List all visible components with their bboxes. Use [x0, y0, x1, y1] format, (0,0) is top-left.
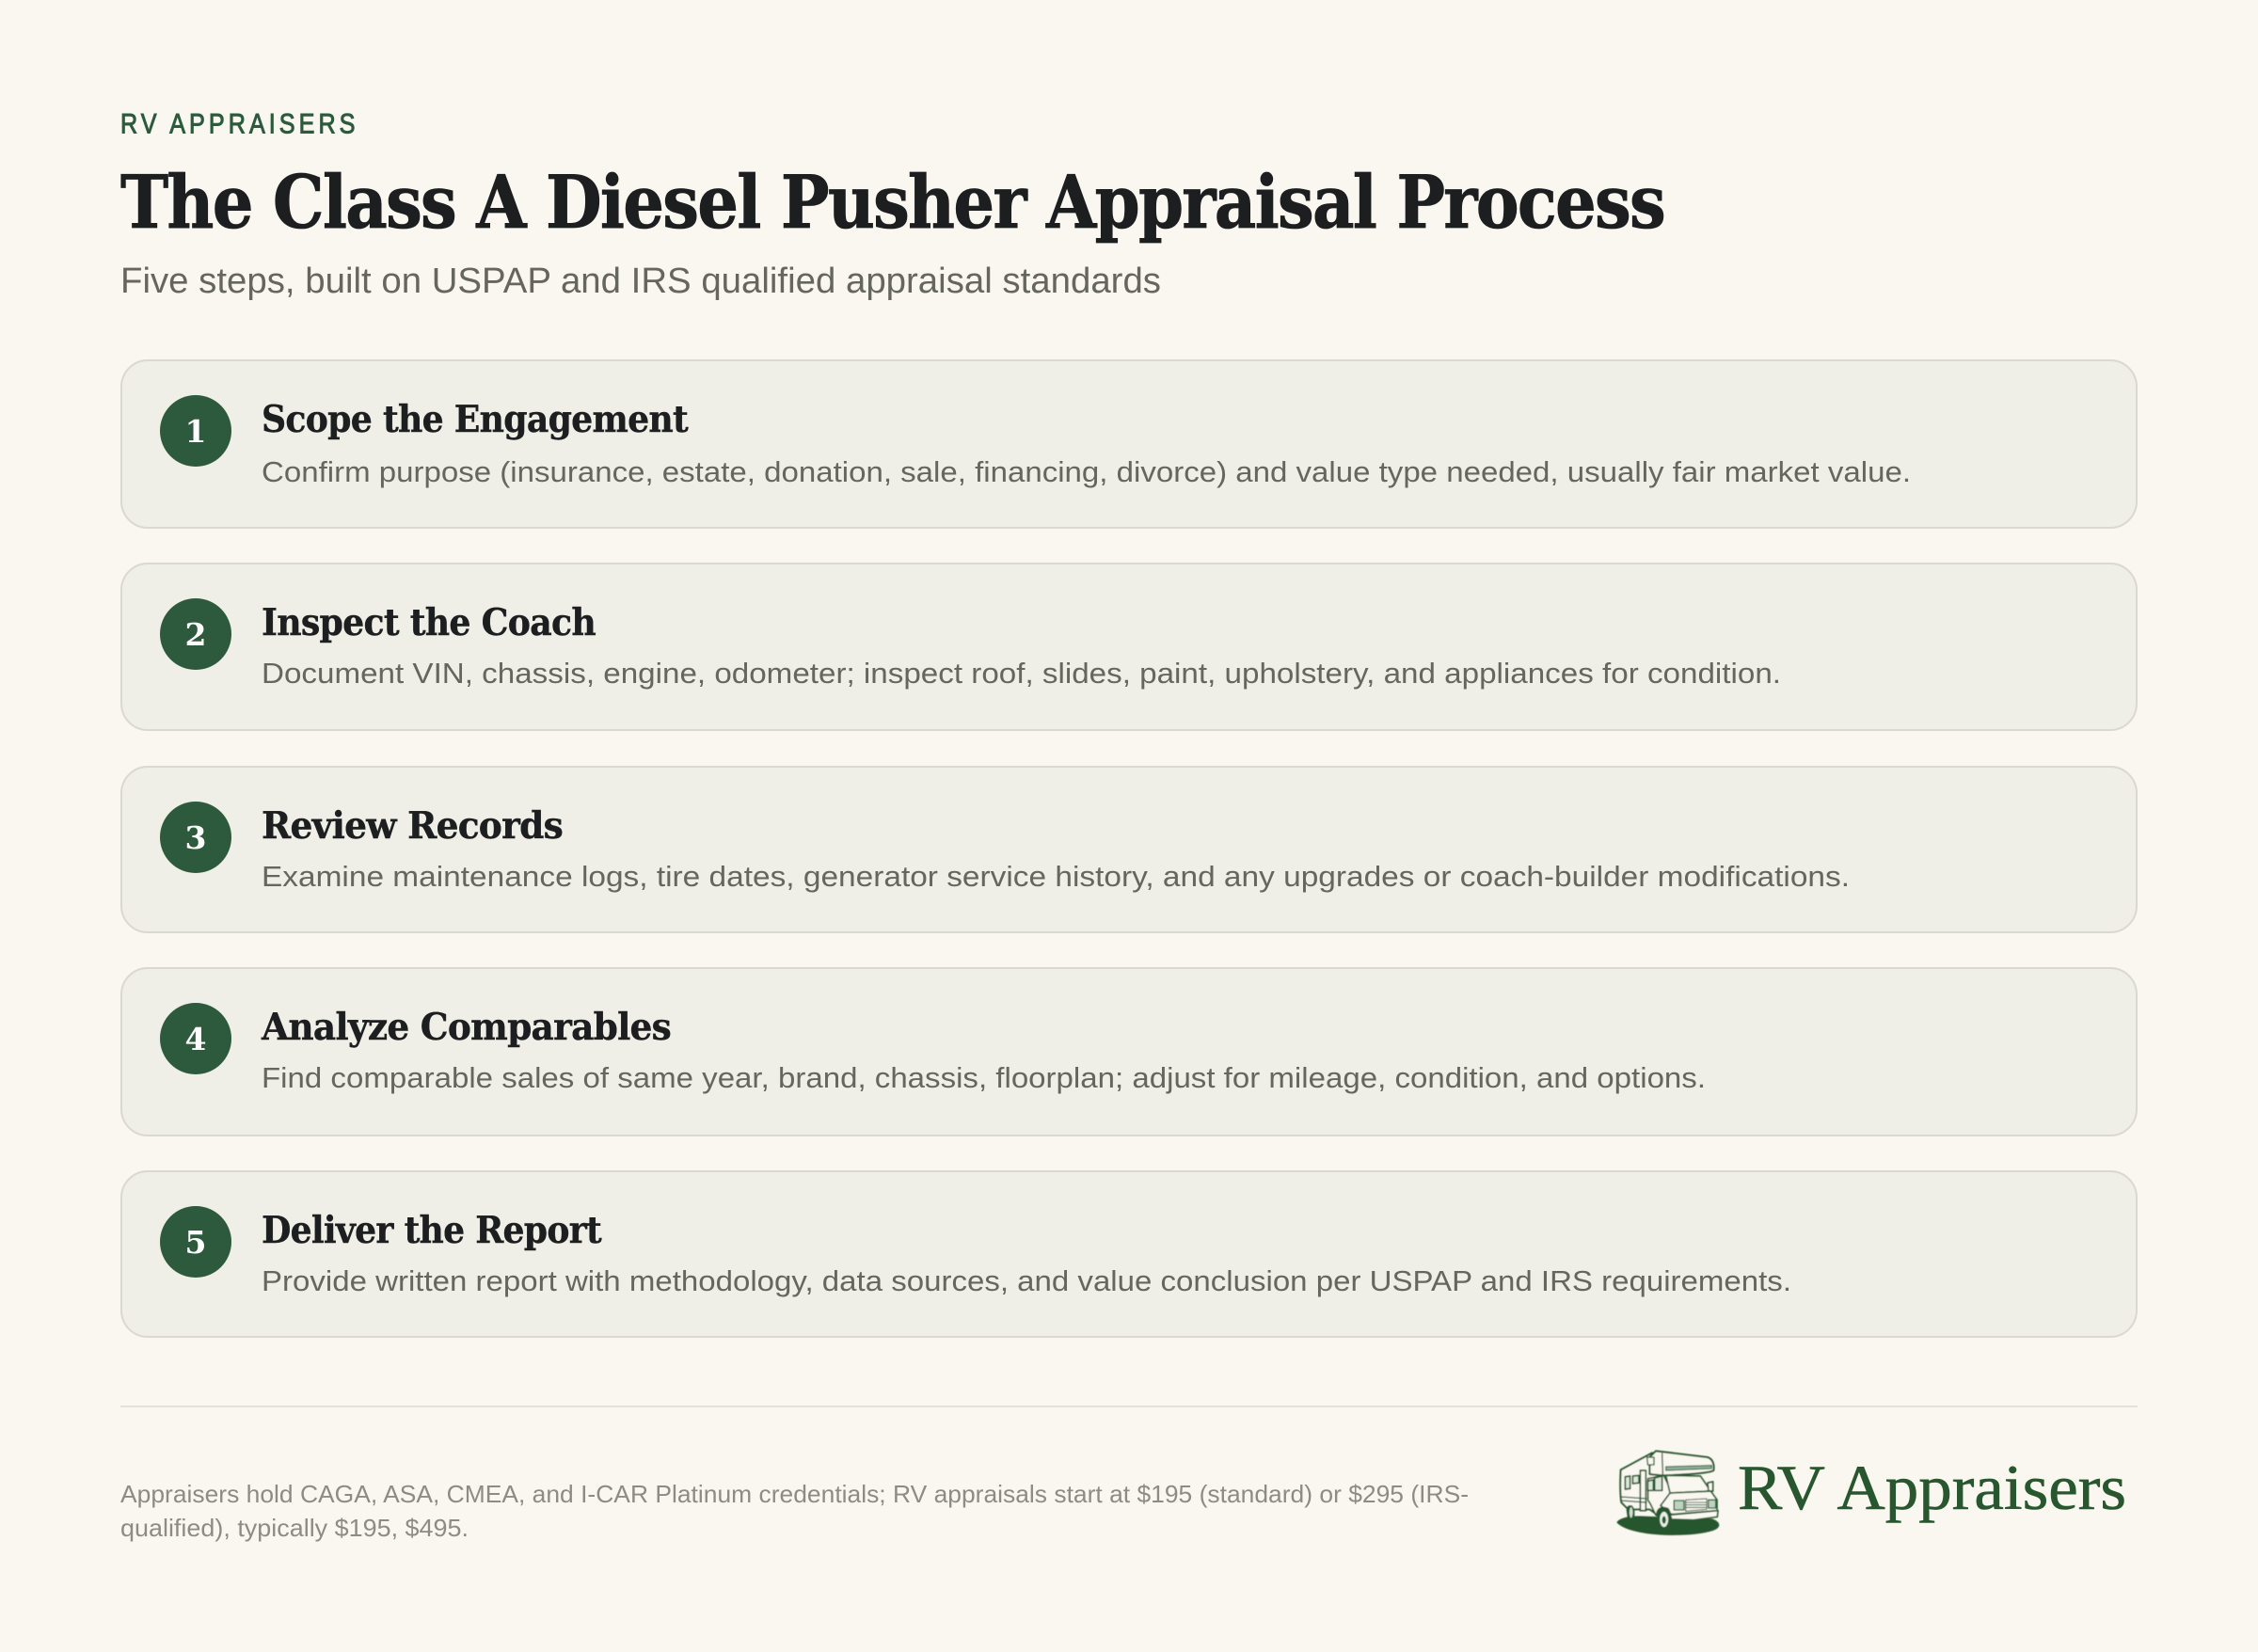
- logo: RV Appraisers: [1616, 1451, 2126, 1535]
- step 5 description: Provide written report with methodology, data sources, and value conclusion per USPAP and IRS requirements.: [262, 1264, 1791, 1297]
- step 4 number badge: [160, 1003, 231, 1074]
- icon: RV motorhome: [1616, 1451, 1719, 1535]
- step 3 number badge: [160, 802, 231, 873]
- footnote: qualified), typically $195, $495.: [120, 1514, 469, 1542]
- step 5 heading: Deliver the Report: [262, 1209, 602, 1252]
- step 3 description: Examine maintenance logs, tire dates, generator service history, and any upgrades or coach-builder modifications.: [262, 860, 1850, 893]
- panel: step 3: [121, 767, 2137, 932]
- step 2 heading: Inspect the Coach: [262, 601, 596, 644]
- footnote: [120, 1480, 1469, 1542]
- step 2 number badge: 2: [185, 616, 206, 653]
- step 2 description: Document VIN, chassis, engine, odometer; inspect roof, slides, paint, upholstery, and appliances for condition.: [262, 657, 1781, 690]
- step 5 number badge: [160, 1206, 231, 1278]
- step 2 number badge: [160, 598, 231, 670]
- footnote: Appraisers hold CAGA, ASA, CMEA, and I-CAR Platinum credentials; RV appraisals start at $195 (standard) or $295 (IRS-: [120, 1480, 1469, 1508]
- step 1 heading: Scope the Engagement: [262, 398, 689, 441]
- step 3 number badge: 3: [185, 819, 206, 856]
- step 4 heading: Analyze Comparables: [261, 1006, 671, 1049]
- title: The Class A Diesel Pusher Appraisal Process: [120, 160, 1664, 246]
- step 5 number badge: 5: [185, 1224, 206, 1261]
- wordmark: RV Appraisers: [1738, 1452, 2126, 1523]
- panel: step 1: [121, 360, 2137, 528]
- step 4 description: Find comparable sales of same year, brand, chassis, floorplan; adjust for mileage, condition, and options.: [262, 1061, 1706, 1094]
- eyebrow label: RV APPRAISERS: [120, 107, 355, 139]
- panel: step 4: [121, 968, 2137, 1136]
- subtitle: Five steps, built on USPAP and IRS qualified appraisal standards: [120, 262, 1161, 301]
- step 4 number badge: 4: [185, 1021, 206, 1057]
- panel: step 2: [121, 564, 2137, 730]
- step 1 number badge: [160, 395, 231, 467]
- panel: step 5: [121, 1171, 2137, 1337]
- step 1 description: Confirm purpose (insurance, estate, donation, sale, financing, divorce) and value type needed, usually fair market value.: [262, 455, 1911, 488]
- step 1 number badge: 1: [185, 413, 206, 450]
- step 3 heading: Review Records: [262, 804, 563, 848]
